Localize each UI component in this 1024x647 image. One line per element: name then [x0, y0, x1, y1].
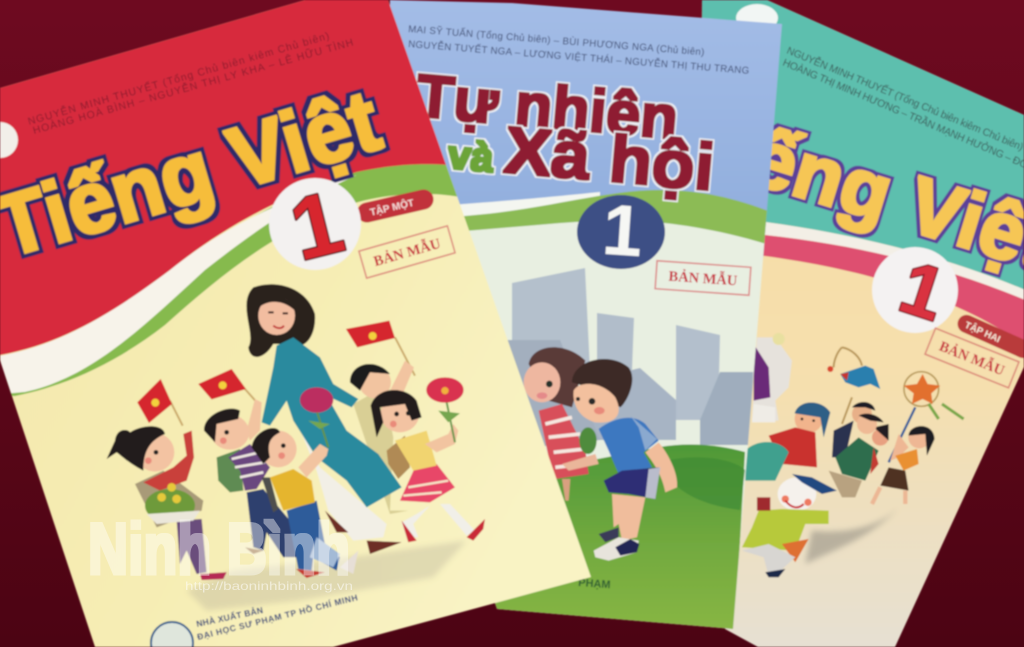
sample stamp: BẢN MẪU: [668, 267, 739, 289]
ground shadows: [187, 541, 467, 611]
authors: NGUYỄN TUYẾT NGA – LƯƠNG VIỆT THÁI – NGUYỄN THỊ THU TRANG: [408, 38, 750, 77]
boy in yellow: [252, 428, 358, 578]
title line 1: Tự nhiên: [414, 62, 681, 152]
shoes: [367, 541, 402, 554]
publisher name: ĐẠI HỌC SƯ PHẠM TP HỒ CHÍ MINH: [196, 591, 359, 642]
title word: và: và: [446, 131, 496, 181]
facial features: [268, 309, 288, 316]
child behind teacher: [350, 361, 414, 514]
number badge: 1: [281, 171, 352, 279]
teal header: [690, 0, 1024, 292]
green arc: [463, 189, 768, 244]
logo: [734, 2, 780, 24]
flag 3: [346, 321, 415, 376]
lion dancer: [752, 333, 792, 422]
soft ground shadow: [804, 515, 890, 564]
authors: NGUYỄN MINH THUYẾT (Tổng Chủ biên kiêm Chủ biên): [785, 44, 1024, 153]
illustration: two children: [524, 347, 677, 561]
sample stamp: [359, 226, 455, 278]
number badge: 1: [890, 245, 955, 337]
illustration: mid-autumn procession: [742, 333, 964, 577]
red header: [0, 0, 448, 356]
darker grass patch: [671, 458, 746, 510]
publisher logo top: [0, 122, 18, 158]
star lantern: [889, 372, 964, 462]
volume pill: [956, 314, 1024, 359]
authors: MAI SỸ TUẤN (Tổng Chủ biên) – BÙI PHƯƠNG NGA (Chủ biên): [408, 24, 705, 58]
child in red: [769, 402, 830, 467]
blue header: [385, 0, 785, 260]
sample stamp: BẢN MẪU: [937, 337, 1008, 379]
white band: [0, 175, 357, 394]
cover base: [690, 0, 1024, 647]
volume pill: [355, 187, 435, 224]
grass field: [490, 445, 745, 632]
volume pill: TẬP MỘT: [369, 196, 415, 219]
teacher: [246, 284, 402, 554]
authors: HOÀNG THỊ MINH HƯƠNG – TRẦN MẠNH HƯỞNG – ĐỖ: [781, 56, 1024, 171]
clown figure: [742, 442, 837, 577]
green band: [0, 164, 460, 396]
publisher name: NHÀ XUẤT BẢN: [195, 604, 264, 629]
girl in pink skirt: [371, 390, 485, 542]
sample stamp: [655, 261, 751, 295]
sample stamp: BẢN MẪU: [371, 234, 443, 270]
watermark: Ninh Bình: Ninh Bình: [88, 509, 350, 590]
children in green: [829, 402, 889, 497]
watermark url: http://baoninhbinh.org.vn: [185, 579, 353, 593]
white strip: [460, 191, 601, 216]
boy: [562, 359, 677, 561]
authors: NGUYỄN MINH THUYẾT (Tổng Chủ biên kiêm Chủ biên): [26, 29, 331, 128]
city skyline: [500, 268, 753, 450]
number badge: 1: [600, 190, 645, 272]
girl: [524, 347, 589, 501]
number badge: [577, 190, 665, 272]
title line 2: Xã hội: [502, 112, 717, 204]
ao dai: [262, 337, 402, 507]
flag 1: [137, 379, 183, 426]
volume pill: TẬP HAI: [963, 319, 1002, 345]
book 2: Tự nhiên và Xã hội 1: [385, 0, 785, 640]
child in orange: [872, 426, 935, 504]
book 3: Tiếng Việt 1 tập hai: [674, 0, 1024, 647]
pink band: [762, 234, 1024, 340]
red flower: [426, 377, 464, 442]
bangs: [257, 295, 298, 314]
grass bush: [579, 427, 597, 454]
fish lantern: [827, 347, 880, 424]
cream cover base: [0, 0, 595, 647]
pale lower cover: [440, 214, 770, 640]
white strip: [764, 222, 1024, 300]
publisher fragment: PHẠM: [578, 577, 611, 591]
book 1: Tiếng Việt 1 tập một: [0, 0, 595, 647]
face: [258, 296, 295, 335]
hair: [246, 284, 315, 357]
flag 2: [198, 369, 258, 404]
girl with bouquet: [107, 426, 227, 580]
publisher logo bottom: [151, 622, 193, 647]
boy with striped shirt: [204, 399, 297, 557]
illustration: teacher and children: [107, 284, 485, 611]
white trousers: [297, 421, 387, 541]
pink flower: [300, 387, 333, 447]
authors: HOÀNG HOÀ BÌNH – NGUYỄN THỊ LY KHA – LÊ HỮU TÌNH: [31, 36, 355, 137]
sample stamp: [925, 328, 1019, 388]
